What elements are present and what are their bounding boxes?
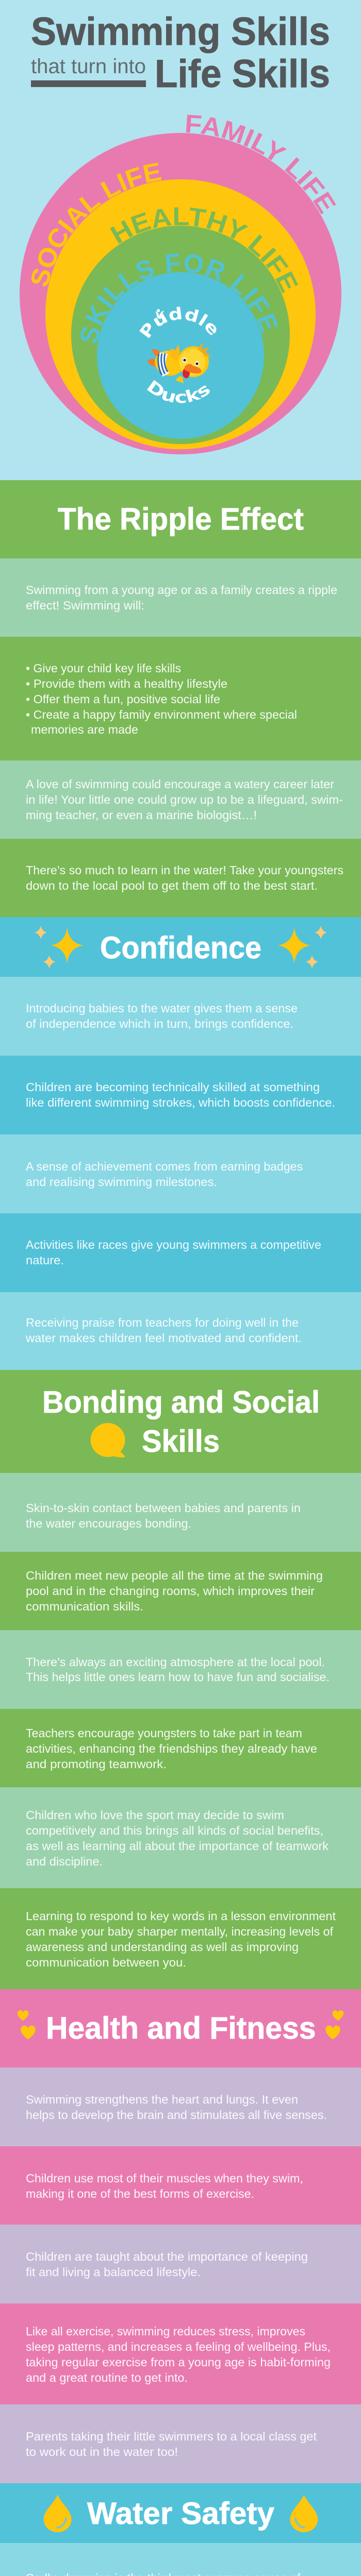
panel: heart and lungs: helps to develop the brain and stimulates all five senses. <box>26 2108 327 2122</box>
panel: meeting new people: pool and in the changing rooms, which improves their <box>26 1584 315 1598</box>
panel: independence <box>0 977 361 1056</box>
title: Swimming Skills <box>31 10 330 54</box>
panel: technically skilled <box>0 1056 361 1134</box>
panel: heart and lungs <box>0 2067 361 2146</box>
panel: competitive swimming: Children who love the sport may decide to swim <box>26 1808 284 1822</box>
ripple circles diagram <box>20 114 341 454</box>
panel: responding to key words: communication between you. <box>26 1956 186 1969</box>
panel: exciting atmosphere <box>0 1630 361 1709</box>
panel: meeting new people: Children meet new people all the time at the swimming <box>26 1569 323 1582</box>
panel: competitive swimming: and discipline. <box>26 1855 103 1868</box>
panel: team activities <box>0 1709 361 1787</box>
icon: hearts left <box>18 2010 36 2039</box>
panel: praise from teachers <box>0 1292 361 1370</box>
panel: reduces stress: sleep patterns, and increases a feeling of wellbeing. Plus, <box>26 2340 331 2353</box>
panel: parents work out: Parents taking their little swimmers to a local class get <box>26 2430 317 2443</box>
panel: responding to key words: Learning to respond to key words in a lesson environment <box>26 1909 336 1923</box>
logo: Puddle Ducks: Puddle <box>139 307 217 338</box>
panel: skin-to-skin bonding: Skin-to-skin contact between babies and parents in <box>26 1501 301 1515</box>
logo: Puddle Ducks: Ducks <box>147 380 210 403</box>
section header: Health and Fitness: Health and Fitness <box>46 2011 316 2045</box>
panel: parents work out <box>0 2404 361 2483</box>
section header: Water Safety: Water Safety <box>87 2496 275 2531</box>
icon: duck <box>147 342 211 383</box>
section header: Water Safety <box>0 2483 361 2543</box>
icon: hearts right <box>325 2010 343 2039</box>
title: Life Skills <box>155 52 330 96</box>
panel: balanced lifestyle: fit and living a balanced lifestyle. <box>26 2265 201 2279</box>
panel: bullet list of benefits: • Offer them a fun, positive social life <box>26 692 220 706</box>
panel: praise from teachers: water makes children feel motivated and confident. <box>25 1331 302 1345</box>
panel: reduces stress: taking regular exercise from a young age is habit-forming <box>26 2355 331 2369</box>
panel: watery career <box>0 760 361 839</box>
label: family life: FAMILY LIFE <box>186 114 336 214</box>
panel: swimming creates a ripple effect: effect! Swimming will: <box>26 599 144 612</box>
panel: competitive swimming <box>0 1787 361 1888</box>
panel: watery career: in life! Your little one could grow up to be a lifeguard, swim- <box>26 793 343 806</box>
panel: technically skilled: like different swimming strokes, which boosts confidence. <box>26 1096 335 1109</box>
panel: responding to key words: awareness and understanding as well as improving <box>26 1940 299 1954</box>
panel: skin-to-skin bonding <box>0 1473 361 1552</box>
panel: responding to key words: can make your baby sharper mentally, increasing levels of <box>26 1925 334 1938</box>
panel: heart and lungs: Swimming strengthens the heart and lungs. It even <box>26 2093 298 2106</box>
panel: bullet list of benefits: • Give your child key life skills <box>26 662 181 675</box>
panel: independence: of independence which in turn, brings confidence. <box>26 1017 293 1030</box>
panel: swimming creates a ripple effect: Swimming from a young age or as a family creates a ripple <box>26 583 337 597</box>
panel: watery career: A love of swimming could encourage a watery career later <box>26 777 334 791</box>
panel: watery career: ming teacher, or even a marine biologist…! <box>26 808 257 822</box>
panel: muscles: Children use most of their muscles when they swim, <box>26 2172 303 2185</box>
panel: independence: Introducing babies to the water gives them a sense <box>26 1002 298 1015</box>
icon: sparkles left <box>35 926 84 969</box>
section header: Confidence: Confidence <box>100 930 261 965</box>
panel: competitive nature: Activities like races give young swimmers a competitive <box>26 1238 321 1251</box>
panel: exciting atmosphere: This helps little ones learn how to have fun and socialise. <box>26 1670 330 1684</box>
panel: bullet list of benefits: • Provide them with a healthy lifestyle <box>26 677 227 690</box>
panel: parents work out: to work out in the water too! <box>26 2445 178 2459</box>
panel: bullet list of benefits: memories are made <box>31 723 138 736</box>
panel: drowning statistic <box>0 2543 361 2576</box>
logo: Puddle Ducks <box>139 307 217 403</box>
icon: water drop right <box>290 2495 318 2532</box>
section header: Bonding and Social Skills: Skills <box>142 1424 220 1459</box>
panel: responding to key words <box>0 1888 361 1989</box>
section header: The Ripple Effect <box>0 480 361 558</box>
panel: team activities: activities, enhancing the friendships they already have <box>26 1742 317 1755</box>
panel: muscles <box>0 2146 361 2225</box>
panel: competitive swimming: as well as learning all about the importance of teamwork <box>26 1839 329 1853</box>
panel: sense of achievement <box>0 1134 361 1213</box>
panel: exciting atmosphere: There’s always an exciting atmosphere at the local pool. <box>26 1655 325 1669</box>
panel: muscles: making it one of the best forms of exercise. <box>26 2187 254 2200</box>
title <box>31 10 330 96</box>
label: social life: SOCIAL LIFE <box>31 163 162 286</box>
title: that turn into <box>31 55 146 78</box>
panel: balanced lifestyle: Children are taught about the importance of keeping <box>26 2250 308 2263</box>
panel: skin-to-skin bonding: the water encourages bonding. <box>26 1517 191 1530</box>
panel: reduces stress: and a great routine to get into. <box>26 2371 188 2384</box>
panel: so much to learn: There’s so much to learn in the water! Take your youngsters <box>26 863 343 877</box>
icon: water drop left <box>44 2495 72 2532</box>
section header: The Ripple Effect: The Ripple Effect <box>58 502 304 536</box>
panel: competitive nature <box>0 1213 361 1292</box>
section header: Bonding and Social Skills <box>0 1370 361 1473</box>
icon: sparkles right <box>277 926 327 969</box>
section header: Health and Fitness <box>0 1989 361 2067</box>
panel: bullet list of benefits <box>0 637 361 760</box>
panel: sense of achievement: and realising swimming milestones. <box>26 1175 217 1189</box>
panel: competitive swimming: competitively and this brings all kinds of social benefits, <box>26 1824 323 1837</box>
icon: speech bubble <box>91 1423 125 1458</box>
panel: reduces stress: Like all exercise, swimming reduces stress, improves <box>26 2325 305 2338</box>
panel: meeting new people: communication skills. <box>26 1600 143 1613</box>
panel: technically skilled: Children are becoming technically skilled at something <box>26 1080 320 1094</box>
panel: team activities: Teachers encourage youngsters to take part in team <box>26 1726 302 1740</box>
panel: meeting new people <box>0 1552 361 1630</box>
panel: balanced lifestyle <box>0 2225 361 2303</box>
panel: praise from teachers: Receiving praise from teachers for doing well in the <box>26 1316 299 1329</box>
panel: bullet list of benefits: • Create a happy family environment where special <box>26 708 297 721</box>
panel: competitive nature: nature. <box>26 1253 64 1267</box>
panel: sense of achievement: A sense of achievement comes from earning badges <box>26 1160 303 1173</box>
label: healthy life: HEALTHY LIFE <box>110 207 298 294</box>
hero section: title and ripple circles <box>20 10 341 454</box>
panel: so much to learn: down to the local pool to get them off to the best start. <box>26 879 318 892</box>
section header: Confidence <box>0 917 361 977</box>
panel: team activities: and promoting teamwork. <box>26 1757 167 1771</box>
label: skills for life: SKILLS FOR LIFE <box>80 253 278 344</box>
panel: swimming creates a ripple effect <box>0 558 361 637</box>
panel: so much to learn <box>0 839 361 917</box>
section header: Bonding and Social Skills: Bonding and Social <box>42 1385 320 1419</box>
panel: reduces stress <box>0 2303 361 2404</box>
